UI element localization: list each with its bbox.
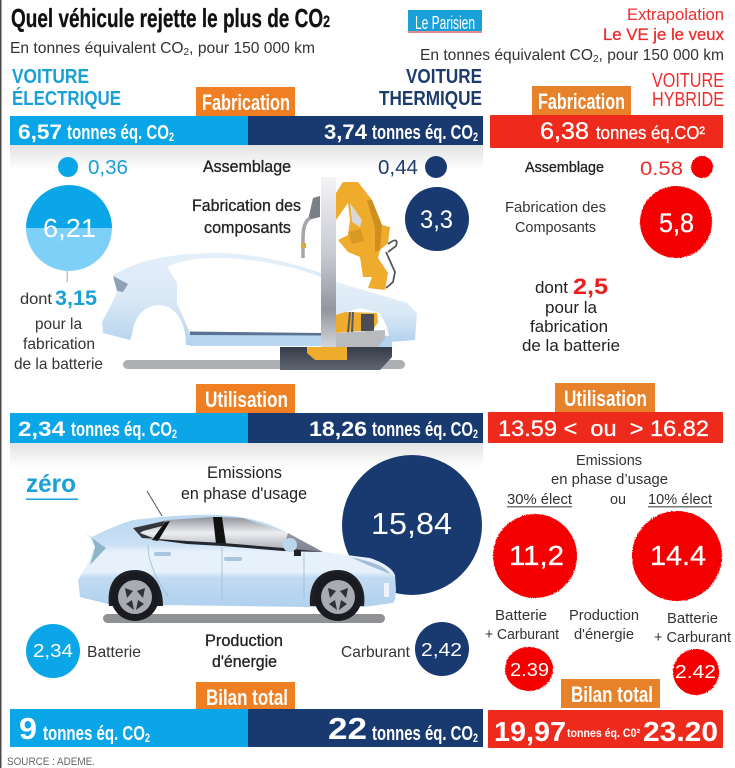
bar: utilisation hybride (488, 412, 723, 443)
bar: bilan total electric vs thermal: 9 (19, 711, 37, 746)
circle: 2.39: 2.39 (510, 660, 549, 680)
illustration: base (280, 330, 392, 370)
bar: bilan total electric vs thermal: 2 (145, 731, 150, 745)
logo: Le Parisien: Le Parisien (415, 13, 475, 33)
illustration: car chassis on assembly line (102, 177, 417, 370)
illustration: gantry column (321, 177, 336, 347)
label: émissions hybride: en phase d’usage (551, 471, 668, 488)
heading: voiture thermique: VOITURE (406, 66, 482, 88)
heading: voiture thermique (379, 66, 482, 110)
tab: fabrication hybride: Fabrication (538, 89, 625, 114)
text: battery share hybride: de la batterie (522, 336, 620, 355)
bar: fabrication electric vs thermal: tonnes éq. CO (372, 122, 508, 144)
circle: 2,42 fuel: 2,42 (421, 640, 462, 660)
tab: bilan total hybride (561, 679, 660, 708)
subtitle: extrapolation: , pour 150 000 km (599, 47, 724, 64)
label: batterie + carburant right: + Carburant (654, 629, 732, 646)
bar: bilan total hybride (488, 710, 723, 748)
bar: bilan total electric vs thermal (10, 709, 483, 747)
logo: Le Parisien (408, 10, 482, 33)
circle: 6,21 components electric: 6,21 (43, 213, 96, 243)
bar: utilisation electric vs thermal: 2 (172, 427, 177, 441)
value: assemblage electric 0,36: 0,36 (88, 157, 128, 179)
illustration: welding torch (301, 196, 320, 258)
label: fabrication des composants hybride: Composants (515, 219, 596, 236)
extrapolation note: Extrapolation (627, 6, 724, 24)
tab: utilisation hybride (555, 383, 655, 412)
bar: fabrication electric vs thermal (10, 116, 483, 145)
extrapolation note: Le VE je le veux (603, 25, 724, 44)
bar: utilisation electric vs thermal: 18,26 (309, 418, 367, 441)
bar: fabrication electric vs thermal: 6,57 (18, 121, 62, 144)
label: batterie + carburant left (485, 607, 560, 643)
subtitle: En tonnes équivalent CO (10, 40, 182, 57)
label: émissions hybride: Emissions (576, 452, 642, 469)
label: émissions en phase d'usage: en phase d'usage (181, 484, 307, 503)
source: SOURCE : ADEME. (7, 756, 95, 768)
extrapolation note (603, 6, 724, 44)
text: battery share hybride: fabrication (530, 317, 608, 336)
bar: utilisation electric vs thermal: tonnes éq. CO (71, 419, 207, 441)
illustration: blue car (78, 491, 396, 623)
circle: 2.42 hybride (673, 649, 719, 695)
tab: fabrication (196, 87, 295, 116)
label: ou: ou (610, 491, 626, 508)
label: batterie + carburant right (654, 610, 732, 646)
circle: 15,84 thermal use: 15,84 (371, 506, 452, 541)
bar: bilan total electric vs thermal: tonnes éq. CO (372, 723, 508, 745)
bar: bilan total electric vs thermal: 2 (473, 731, 478, 745)
text: battery share electric: fabrication (23, 336, 95, 353)
tab: bilan total (196, 682, 295, 710)
label: carburant: Carburant (341, 644, 411, 661)
value: assemblage electric 0,36 (58, 157, 128, 179)
bar: utilisation electric vs thermal (10, 413, 483, 443)
label: production d'énergie: Production (205, 632, 283, 650)
text: battery share hybride: 2,5 (573, 274, 608, 299)
bar: fabrication electric vs thermal: 3,74 (324, 121, 367, 144)
label: fabrication des composants: Fabrication des (192, 197, 301, 215)
tab: fabrication hybride (532, 86, 631, 115)
circle: 11,2: 11,2 (509, 540, 564, 571)
label: batterie + carburant left: + Carburant (485, 626, 560, 643)
value: assemblage hybride 0.58 (640, 156, 713, 180)
value: assemblage thermal 0,44: 0,44 (378, 157, 418, 179)
text: battery share electric: de la batterie (14, 356, 103, 373)
circle: 15,84 thermal use (342, 455, 482, 595)
text: battery share electric: pour la (35, 316, 82, 333)
tab: bilan total hybride: Bilan total (571, 682, 653, 707)
label: fabrication des composants hybride (505, 199, 606, 236)
circle: 2.42 hybride: 2.42 (675, 662, 716, 682)
circle: 11,2 (493, 514, 577, 598)
circle: 5,8 components hybride (640, 186, 712, 258)
label: batterie + carburant right: Batterie (667, 610, 718, 627)
label: fabrication des composants (192, 197, 301, 237)
bar: utilisation electric vs thermal: 2 (473, 427, 478, 441)
circle: 14.4 (632, 511, 722, 601)
text: battery share electric (14, 287, 103, 373)
bar: fabrication hybride: tonnes éq.CO² (596, 123, 705, 143)
label: production d'énergie hybride (569, 607, 639, 643)
bar: utilisation electric vs thermal: 2,34 (18, 418, 65, 441)
subtitle: 2 (184, 47, 190, 58)
heading: voiture électrique: ÉLECTRIQUE (12, 87, 121, 110)
heading: voiture électrique (12, 66, 121, 110)
heading: voiture électrique: VOITURE (12, 66, 89, 88)
bar: bilan total electric vs thermal: 22 (328, 711, 367, 746)
tab: utilisation: Utilisation (205, 387, 288, 412)
subtitle: , pour 150 000 km (189, 40, 315, 57)
bar: fabrication electric vs thermal: 2 (169, 130, 174, 144)
text: battery share hybride (522, 274, 620, 355)
bar: fabrication electric vs thermal: 2 (473, 130, 478, 144)
circle: 14.4: 14.4 (650, 540, 706, 571)
bar: bilan total hybride: tonnes éq. C0² (567, 726, 640, 740)
label: batterie: Batterie (87, 644, 141, 661)
tab: utilisation hybride: Utilisation (564, 386, 647, 411)
circle: 2.39 (505, 647, 553, 691)
text: battery share electric: 3,15 (55, 287, 97, 310)
label: émissions en phase d'usage: Emissions (207, 463, 282, 482)
circle: 3,3 components thermal: 3,3 (420, 206, 453, 234)
tab: utilisation (196, 384, 295, 413)
wheels (109, 570, 364, 621)
value: assemblage thermal 0,44 (378, 156, 447, 179)
circle: 2,34 battery (26, 624, 80, 678)
circle: 5,8 components hybride: 5,8 (659, 208, 694, 238)
bar: utilisation electric vs thermal: tonnes éq. CO (372, 419, 508, 441)
page frame (0, 0, 2, 768)
label: assemblage: Assemblage (203, 158, 291, 176)
subtitle: extrapolation: 2 (593, 54, 599, 65)
text: battery share electric: dont (20, 291, 53, 308)
bar: bilan total electric vs thermal: tonnes éq. CO (43, 723, 179, 745)
bar: bilan total hybride: 19,97 (494, 716, 566, 747)
illustration: robot arm (336, 182, 397, 333)
label: batterie + carburant left: Batterie (495, 607, 547, 624)
label: 10% élect: 10% élect (648, 491, 713, 508)
label: émissions hybride (551, 452, 668, 488)
label: émissions en phase d'usage (181, 463, 307, 503)
circle: 2,34 battery: 2,34 (33, 641, 73, 661)
label: fabrication des composants hybride: Fabrication des (505, 199, 606, 216)
label: production d'énergie: d'énergie (212, 653, 277, 671)
bar: bilan total hybride: 23.20 (643, 716, 718, 747)
label: production d'énergie (205, 632, 283, 671)
label: assemblage hybride: Assemblage (525, 159, 604, 176)
bar: fabrication electric vs thermal: tonnes éq. CO (67, 122, 203, 144)
circle: 2,42 fuel (415, 622, 469, 676)
heading: voiture thermique: THERMIQUE (379, 88, 482, 110)
subtitle: extrapolation: En tonnes équivalent CO (420, 47, 592, 64)
label: production d'énergie hybride: d'énergie (574, 626, 634, 643)
label: zéro: zéro (26, 470, 76, 498)
text: battery share hybride: dont (535, 278, 568, 297)
value: assemblage hybride 0.58: 0.58 (640, 159, 683, 180)
title: Quel véhicule rejette le plus de CO2 (11, 3, 330, 33)
bar: fabrication hybride: 6,38 (540, 118, 589, 145)
label: production d'énergie hybride: Production (569, 607, 639, 624)
label: fabrication des composants: composants (204, 219, 291, 237)
bar: utilisation hybride: 13.59 < ou > 16.82 (498, 416, 709, 441)
tab: bilan total: Bilan total (206, 685, 288, 710)
heading: voiture hybride (652, 70, 724, 111)
tab: fabrication: Fabrication (202, 90, 290, 115)
circle: 3,3 components thermal (405, 187, 469, 251)
circle: 6,21 components electric (26, 185, 112, 282)
text: battery share hybride: pour la (545, 298, 598, 317)
bar: fabrication hybride (490, 115, 723, 148)
label: 30% élect: 30% élect (507, 491, 573, 508)
